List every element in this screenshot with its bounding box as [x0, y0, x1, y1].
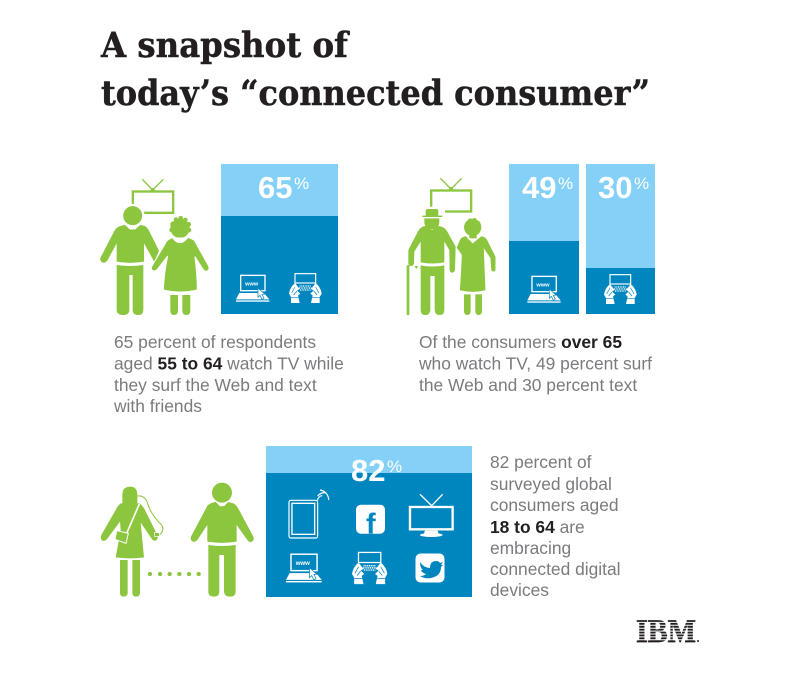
text: over 65 description: the Web and 30 percent text [419, 375, 637, 395]
icon: older couple watching TV [407, 178, 496, 315]
icon: laptop [286, 554, 322, 582]
text: 18 to 64 description: are [555, 517, 585, 537]
logo: IBM: IBM [636, 614, 696, 650]
text: 55 to 64 description: 65 percent of respondents [114, 332, 316, 352]
text: 18 to 64 description: connected digital [490, 559, 621, 579]
icon: couple watching TV [100, 179, 209, 315]
panel: over 65 [407, 164, 657, 395]
value: 82%: % [387, 457, 402, 476]
text: over 65 description: Of the consumers [419, 332, 561, 352]
icon: tablet with wifi [289, 490, 329, 538]
text: 55 to 64 description: aged [114, 354, 158, 374]
panel: ages 18 to 64 [101, 446, 625, 600]
title: A snapshot of [100, 25, 350, 66]
icon: laptop: www [295, 561, 310, 567]
value: 65%: 65 [258, 170, 292, 205]
icon: young woman and man connected [101, 483, 254, 597]
text: 18 to 64 description: devices [490, 580, 549, 600]
text: over 65 description: who watch TV, 49 percent surf [418, 354, 652, 374]
value: 49% [522, 170, 573, 205]
bar chart: 82 percent [266, 446, 472, 597]
value: 49%: % [558, 174, 573, 193]
title: today’s “connected consumer” [101, 73, 650, 114]
icon: laptop [236, 275, 269, 302]
bar chart: 65 percent [221, 164, 338, 314]
text: 55 to 64 description: they surf the Web and text [114, 375, 317, 395]
text: 18 to 64 description: consumers aged [490, 495, 619, 515]
text: 55 to 64 description: 55 to 64 watch TV while [158, 354, 344, 374]
text: 55 to 64 description: with friends [113, 396, 202, 416]
text: over 65 description: over 65 [561, 332, 622, 352]
value: 65%: % [294, 174, 309, 193]
text: 18 to 64 description: embracing [490, 538, 571, 558]
bar chart: 30 percent [586, 164, 655, 314]
value: 30%: % [634, 174, 649, 193]
icon: hands on keyboard [604, 275, 637, 304]
text: 18 to 64 description: 82 percent of [490, 452, 592, 472]
value: 82% [351, 453, 402, 488]
icon: Facebook: f [366, 508, 376, 540]
value: 30% [598, 170, 649, 205]
icon: laptop: www [244, 281, 259, 287]
text: 18 to 64 description: surveyed global [490, 474, 612, 494]
title [100, 25, 650, 114]
bar chart: 49 percent [509, 164, 579, 314]
icon: television [410, 494, 453, 537]
value: 30%: 30 [598, 170, 632, 205]
value: 65% [258, 170, 309, 205]
icon: Twitter [416, 554, 444, 582]
icon: hands on keyboard [289, 274, 322, 303]
value: 49%: 49 [522, 170, 556, 205]
icon: hands on keyboard [352, 552, 387, 584]
icon: laptop [527, 276, 561, 303]
icon: laptop: www [535, 282, 550, 288]
value: 82%: 82 [351, 453, 385, 488]
panel: ages 55 to 64 [100, 164, 349, 416]
text: 18 to 64 description: 18 to 64 [490, 517, 555, 537]
icon: Facebook [356, 505, 385, 540]
